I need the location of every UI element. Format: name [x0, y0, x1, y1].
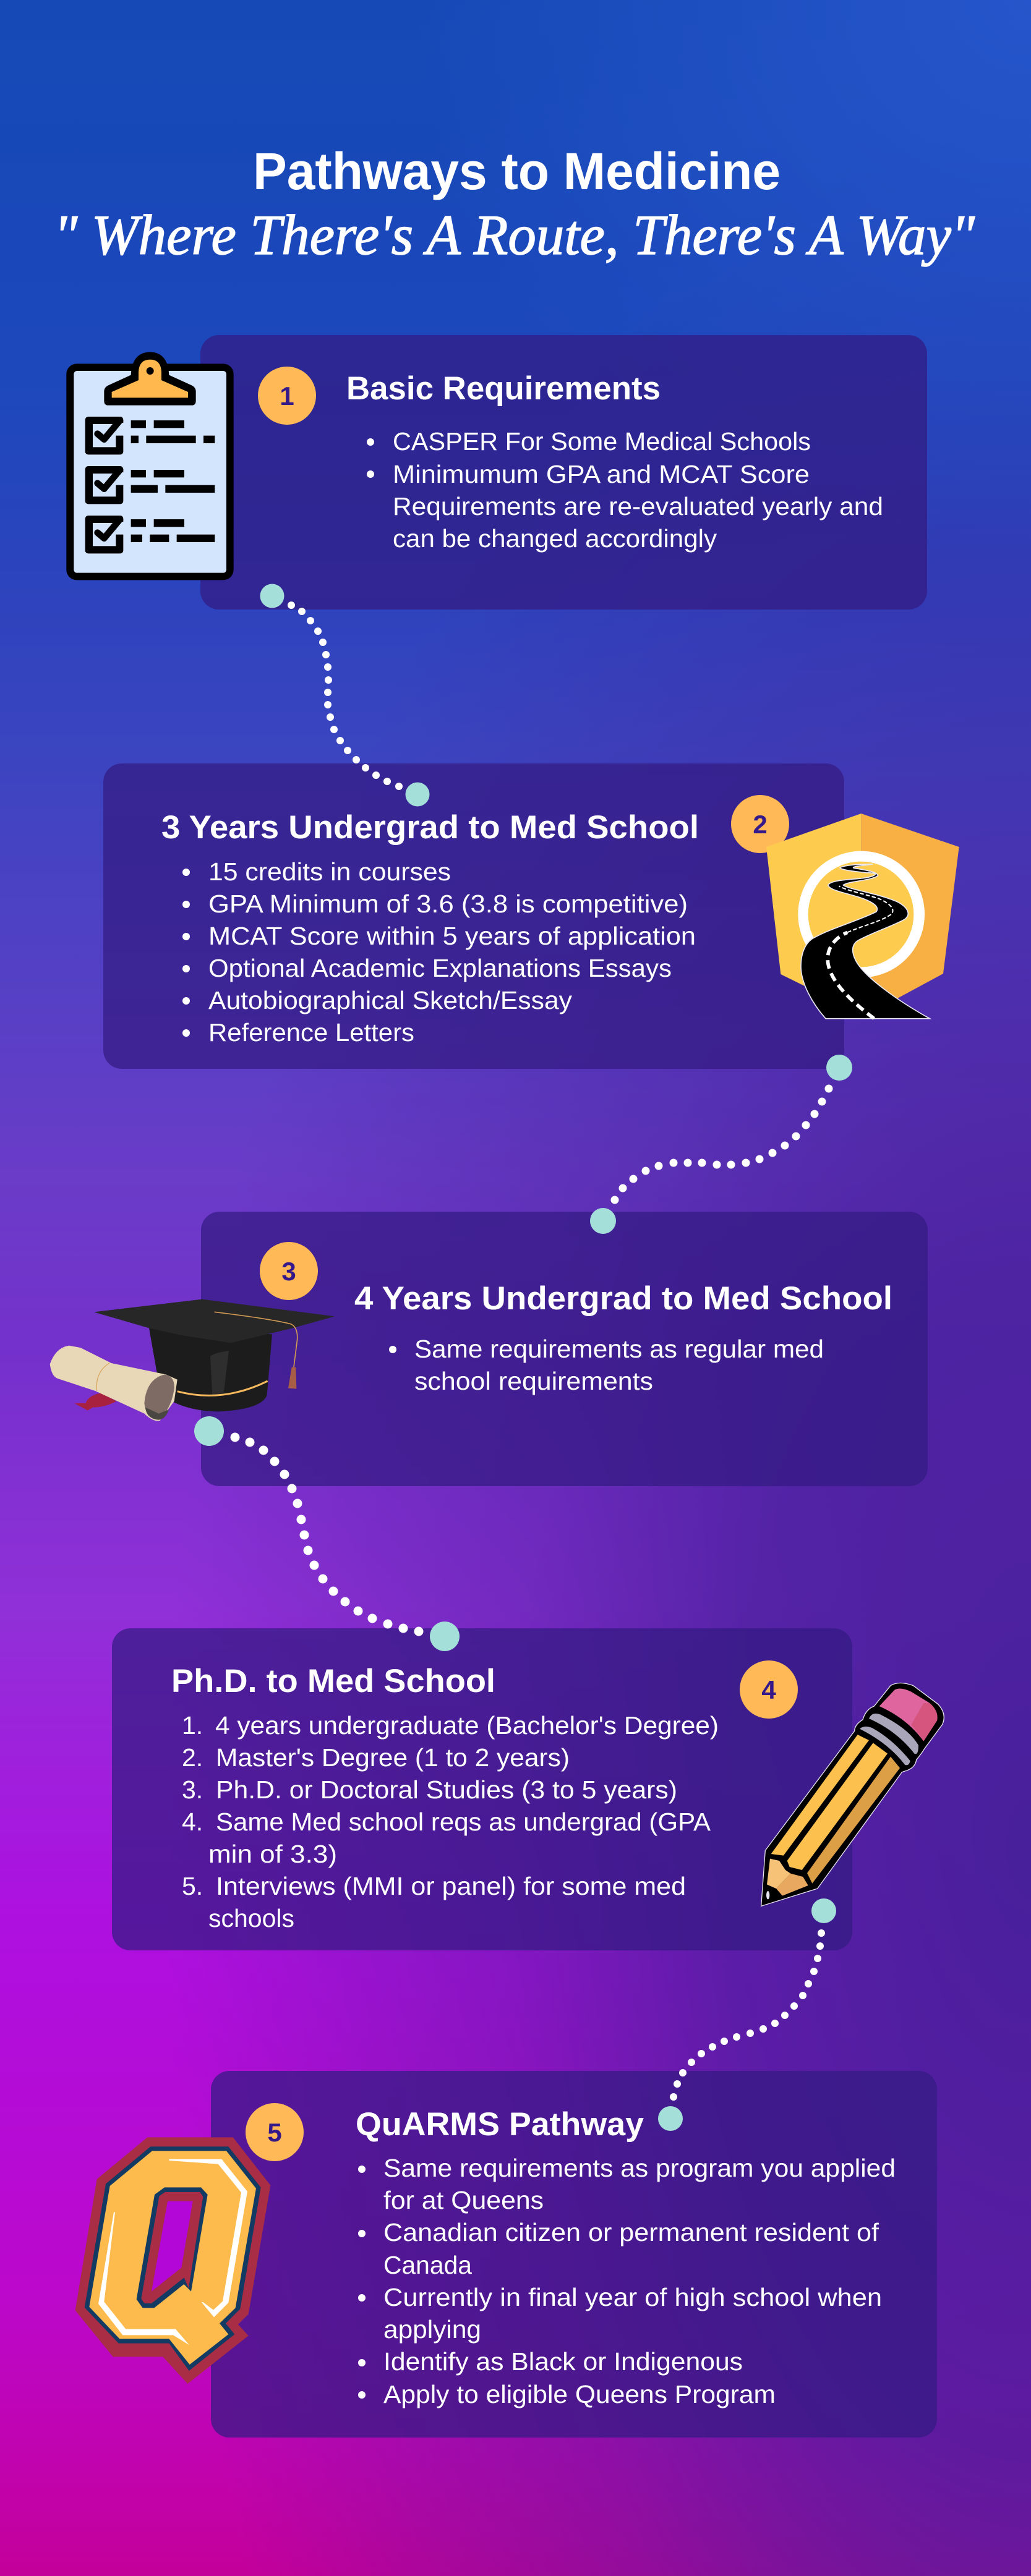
numbered list: 4. — [182, 1808, 203, 1836]
bullet list: Same requirements as regular med — [414, 1335, 824, 1363]
numbered list: Same Med school reqs as undergrad (GPA — [216, 1808, 711, 1836]
bullet list: for at Queens — [383, 2186, 544, 2214]
heading: 4 years undergrad: 4 Years Undergrad to Med School — [354, 1280, 892, 1317]
numbered list: 5. — [182, 1872, 203, 1900]
bullet list: Reference Letters — [208, 1018, 414, 1047]
dotted connector 3 — [230, 1433, 423, 1636]
panel: 3 years undergrad — [103, 763, 844, 1069]
badge 2: 2 — [753, 810, 768, 839]
numbered list: 1. — [182, 1711, 203, 1740]
bullet list: 15 credits in courses — [208, 857, 451, 886]
badge 2 — [731, 795, 789, 853]
numbered list: Master's Degree (1 to 2 years) — [216, 1743, 570, 1772]
badge 4: 4 — [761, 1675, 776, 1704]
numbered list: 4 years undergraduate (Bachelor's Degree) — [215, 1711, 719, 1740]
connector nodes — [194, 584, 852, 2131]
icon: pencil — [761, 1683, 944, 1906]
heading: quarms: QuARMS Pathway — [356, 2106, 644, 2143]
bullet list: Autobiographical Sketch/Essay — [208, 986, 573, 1014]
panel: phd to med school — [112, 1628, 852, 1950]
bullet list: Minimumum GPA and MCAT Score — [393, 460, 810, 488]
icon: graduation cap and diploma — [50, 1299, 335, 1421]
bullet list — [389, 1335, 824, 1395]
bullet list: Optional Academic Explanations Essays — [208, 954, 672, 982]
bullet list — [358, 2154, 896, 2408]
dotted connector 1 — [288, 601, 403, 790]
numbered list — [182, 1711, 719, 1932]
bullet list: Requirements are re-evaluated yearly and — [393, 492, 883, 521]
numbered list: 2. — [182, 1743, 203, 1772]
heading: 3 years undergrad: 3 Years Undergrad to Med School — [161, 809, 699, 846]
panel: basic requirements — [200, 335, 927, 610]
badge 4 — [740, 1660, 798, 1719]
bullet list — [367, 427, 883, 553]
panel: 4 years undergrad — [201, 1212, 928, 1486]
bullet list: applying — [383, 2315, 481, 2344]
bullet list: Identify as Black or Indigenous — [383, 2347, 743, 2376]
title: Pathways to Medicine — [253, 142, 781, 200]
bullet list: Canada — [383, 2251, 472, 2279]
dotted connector 2 — [611, 1084, 832, 1204]
badge 3 — [260, 1242, 318, 1300]
heading: phd: Ph.D. to Med School — [171, 1663, 495, 1699]
bullet list: Currently in final year of high school when — [383, 2283, 882, 2311]
numbered list: Interviews (MMI or panel) for some med — [216, 1872, 686, 1900]
bullet list: GPA Minimum of 3.6 (3.8 is competitive) — [208, 890, 688, 918]
icon: winding road shield — [766, 814, 959, 1022]
heading: basic requirements: Basic Requirements — [346, 370, 661, 407]
numbered list: min of 3.3) — [208, 1840, 337, 1868]
bullet list: MCAT Score within 5 years of application — [208, 922, 696, 950]
bullet list — [182, 857, 696, 1047]
bullet list: school requirements — [414, 1367, 653, 1395]
numbered list: Ph.D. or Doctoral Studies (3 to 5 years) — [216, 1775, 677, 1804]
panel: quarms pathway — [211, 2071, 937, 2438]
dotted connector 4 — [670, 1929, 825, 2101]
icon: Q logo — [75, 2137, 270, 2384]
badge 3: 3 — [281, 1257, 296, 1286]
badge 5 — [246, 2103, 304, 2161]
numbered list: schools — [208, 1904, 294, 1932]
badge 1 — [258, 367, 316, 425]
bullet list: Apply to eligible Queens Program — [383, 2380, 776, 2408]
badge 1: 1 — [280, 381, 294, 410]
numbered list: 3. — [182, 1775, 203, 1804]
bullet list: CASPER For Some Medical Schools — [393, 427, 811, 456]
bullet list: can be changed accordingly — [393, 524, 717, 553]
bullet list: Canadian citizen or permanent resident of — [383, 2218, 879, 2247]
subtitle: " Where There's A Route, There's A Way" — [54, 203, 975, 266]
badge 5: 5 — [267, 2118, 282, 2147]
icon: clipboard — [66, 352, 234, 580]
bullet list: Same requirements as program you applied — [383, 2154, 896, 2182]
